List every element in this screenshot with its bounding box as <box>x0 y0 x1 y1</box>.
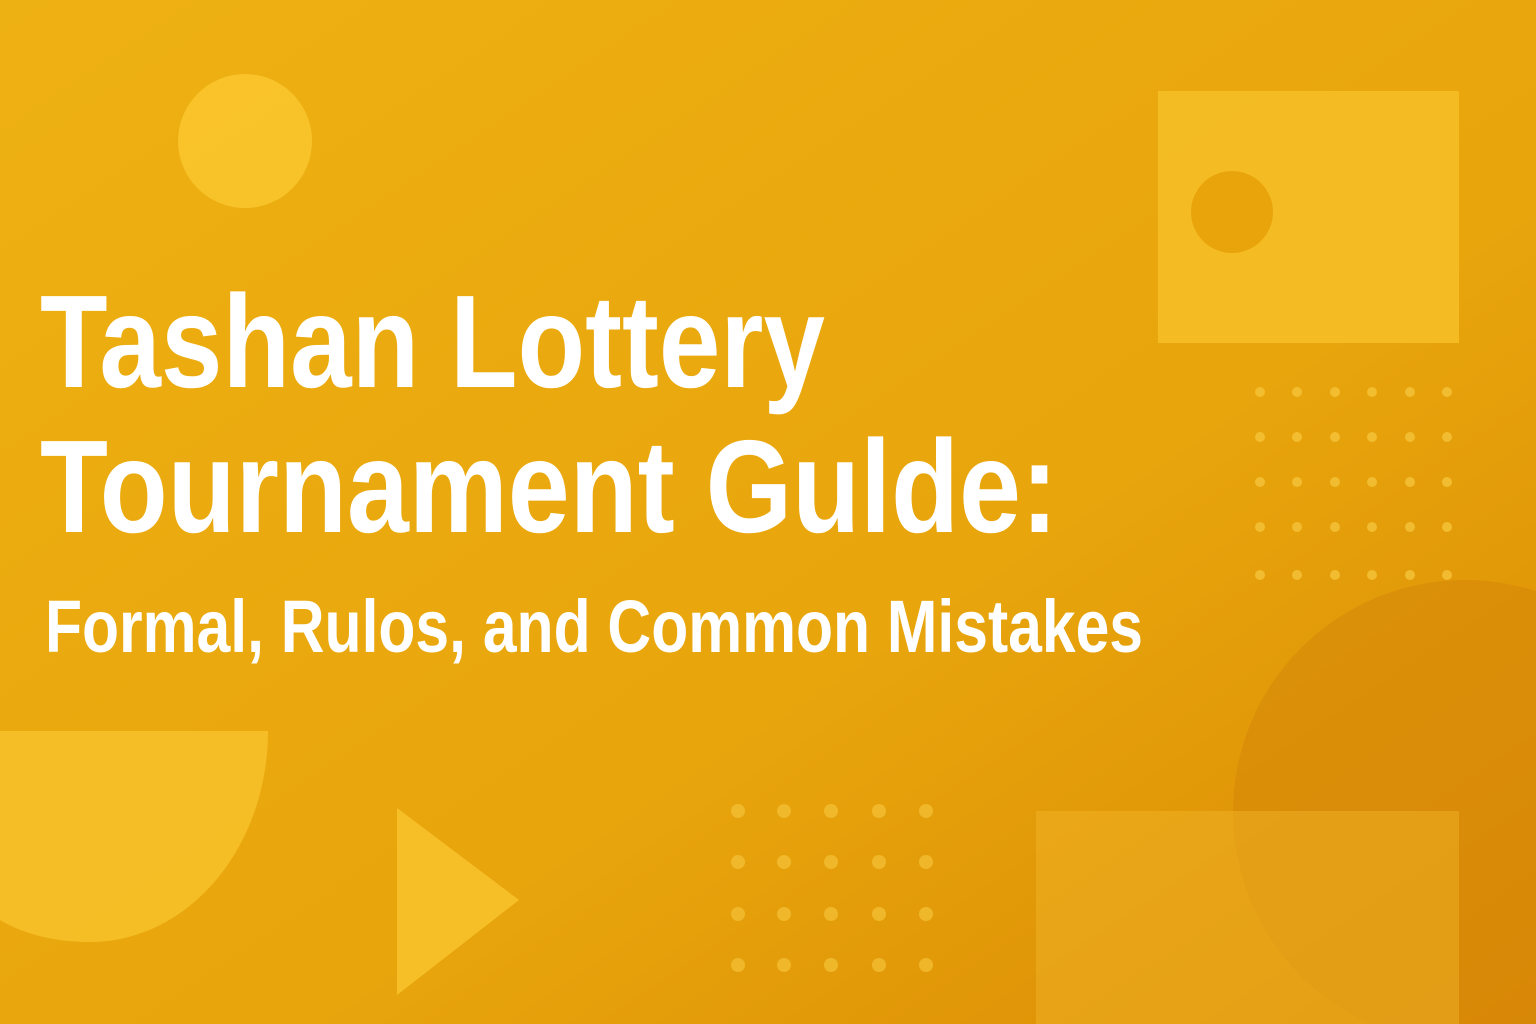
subtitle: Formal, Rulos, and Common Mistakes <box>45 585 1143 668</box>
title <box>40 268 1058 560</box>
shape: bottom-right rectangle <box>1036 811 1459 1024</box>
title: Tournament Gulde: <box>40 413 1058 560</box>
shape: top-left circle <box>178 74 312 208</box>
title: Tashan Lottery <box>40 268 825 415</box>
shape: triangle <box>397 808 519 995</box>
shape: top-right square with circle <box>1158 91 1459 343</box>
dots grid: right <box>1255 387 1452 580</box>
shape: bottom-left half circle <box>0 731 268 942</box>
shape: large bottom-right circle <box>1233 580 1536 1024</box>
dots grid: bottom <box>731 804 933 972</box>
